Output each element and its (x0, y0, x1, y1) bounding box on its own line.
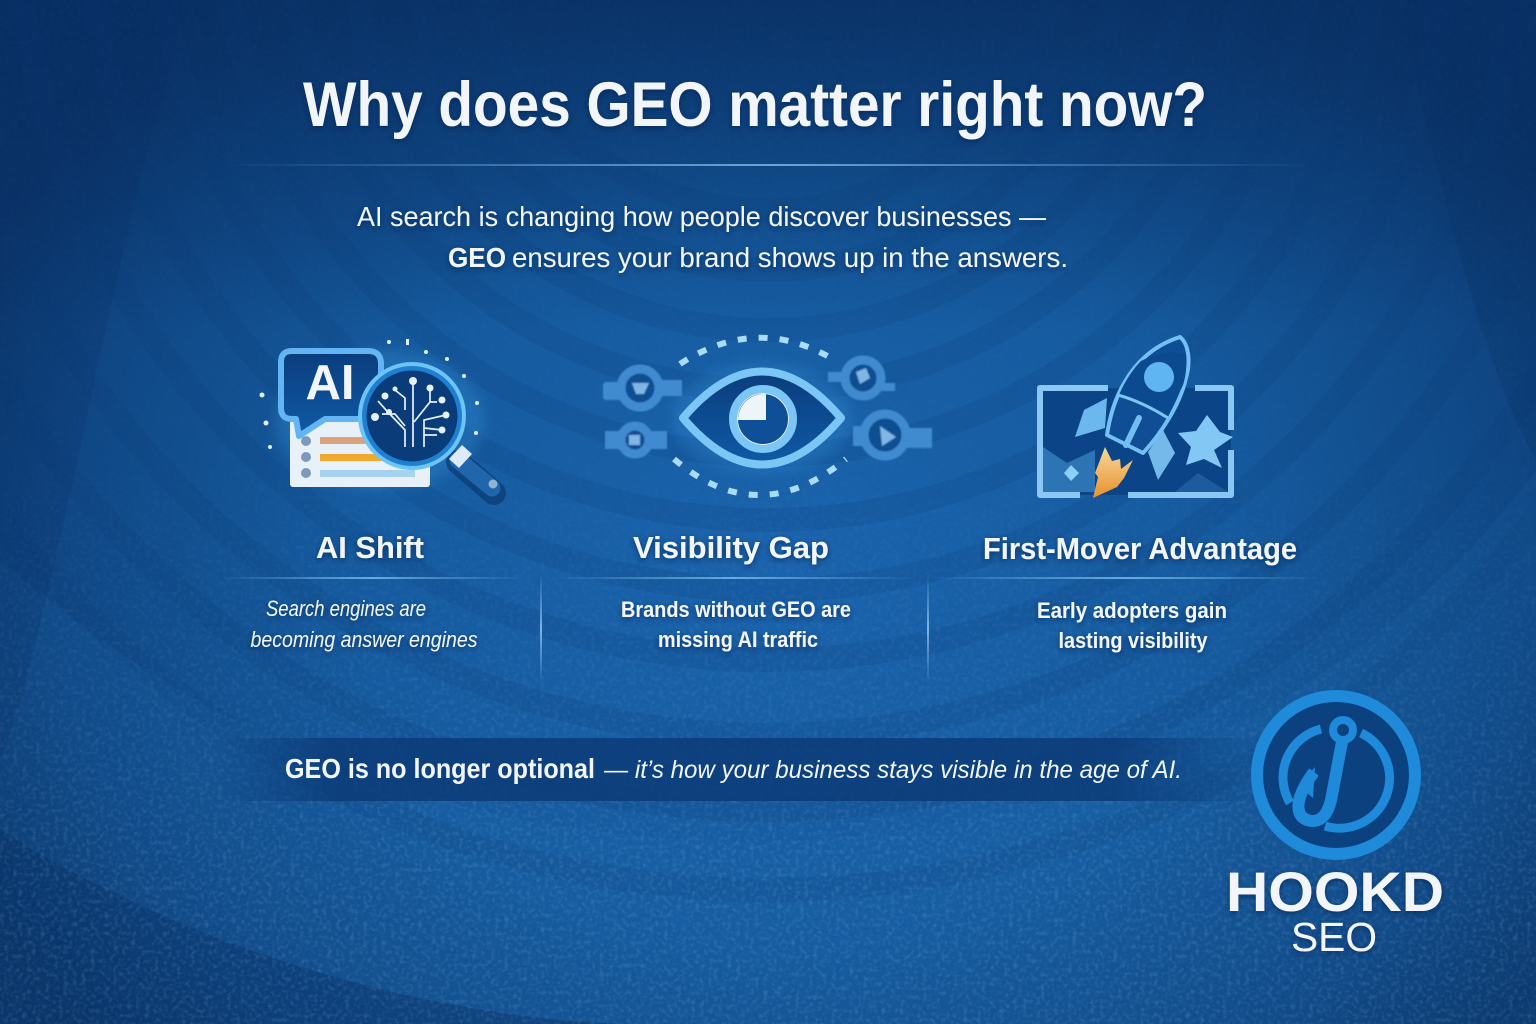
column: AI Shift (250, 530, 478, 652)
logo: Hookd SEO: HOOKD (1226, 860, 1444, 923)
column: Visibility Gap (621, 530, 851, 652)
column: Visibility Gap: missing AI traffic (658, 627, 818, 652)
speech bubble (281, 351, 381, 436)
callout banner: — it’s how your business stays visible in the age of AI. (603, 756, 1182, 784)
rocket body (1107, 337, 1188, 453)
eye shape (683, 372, 841, 464)
column: First-Mover Advantage: lasting visibility (1058, 628, 1208, 653)
icon: eye (603, 338, 932, 495)
logo: Hookd SEO (1226, 696, 1444, 960)
sparkle dots (260, 339, 479, 449)
column: First-Mover Advantage: First-Mover Advantage (983, 531, 1297, 566)
column: AI Shift: Search engines are (266, 596, 426, 621)
icon: AI search (260, 339, 498, 493)
intro text: AI search is changing how people discover businesses — (357, 201, 1046, 232)
star (1178, 415, 1233, 468)
title: Why does GEO matter right now? (303, 70, 1207, 140)
column: Visibility Gap: Visibility Gap (633, 530, 829, 565)
results document (290, 420, 430, 487)
fins (1075, 398, 1107, 437)
column: First-Mover Advantage (983, 531, 1297, 653)
dashed orbit (674, 338, 846, 495)
magnifier (360, 364, 498, 493)
icon: rocket (1040, 337, 1233, 498)
callout banner: GEO is no longer optional (285, 753, 595, 784)
column: First-Mover Advantage: Early adopters gain (1037, 598, 1227, 623)
logo ring and hook (1257, 696, 1415, 854)
flame (1093, 447, 1133, 498)
speech bubble: AI (306, 356, 354, 410)
callout banner (210, 738, 1270, 801)
intro text: GEO (448, 242, 506, 273)
column: AI Shift: becoming answer engines (250, 627, 478, 652)
intro text: ensures your brand shows up in the answers. (512, 242, 1068, 273)
logo: Hookd SEO: SEO (1291, 914, 1377, 960)
column: Visibility Gap: Brands without GEO are (621, 597, 851, 622)
column: AI Shift: AI Shift (316, 530, 424, 565)
satellite icons (603, 360, 932, 456)
intro text (357, 201, 1068, 273)
frame (1040, 388, 1231, 495)
